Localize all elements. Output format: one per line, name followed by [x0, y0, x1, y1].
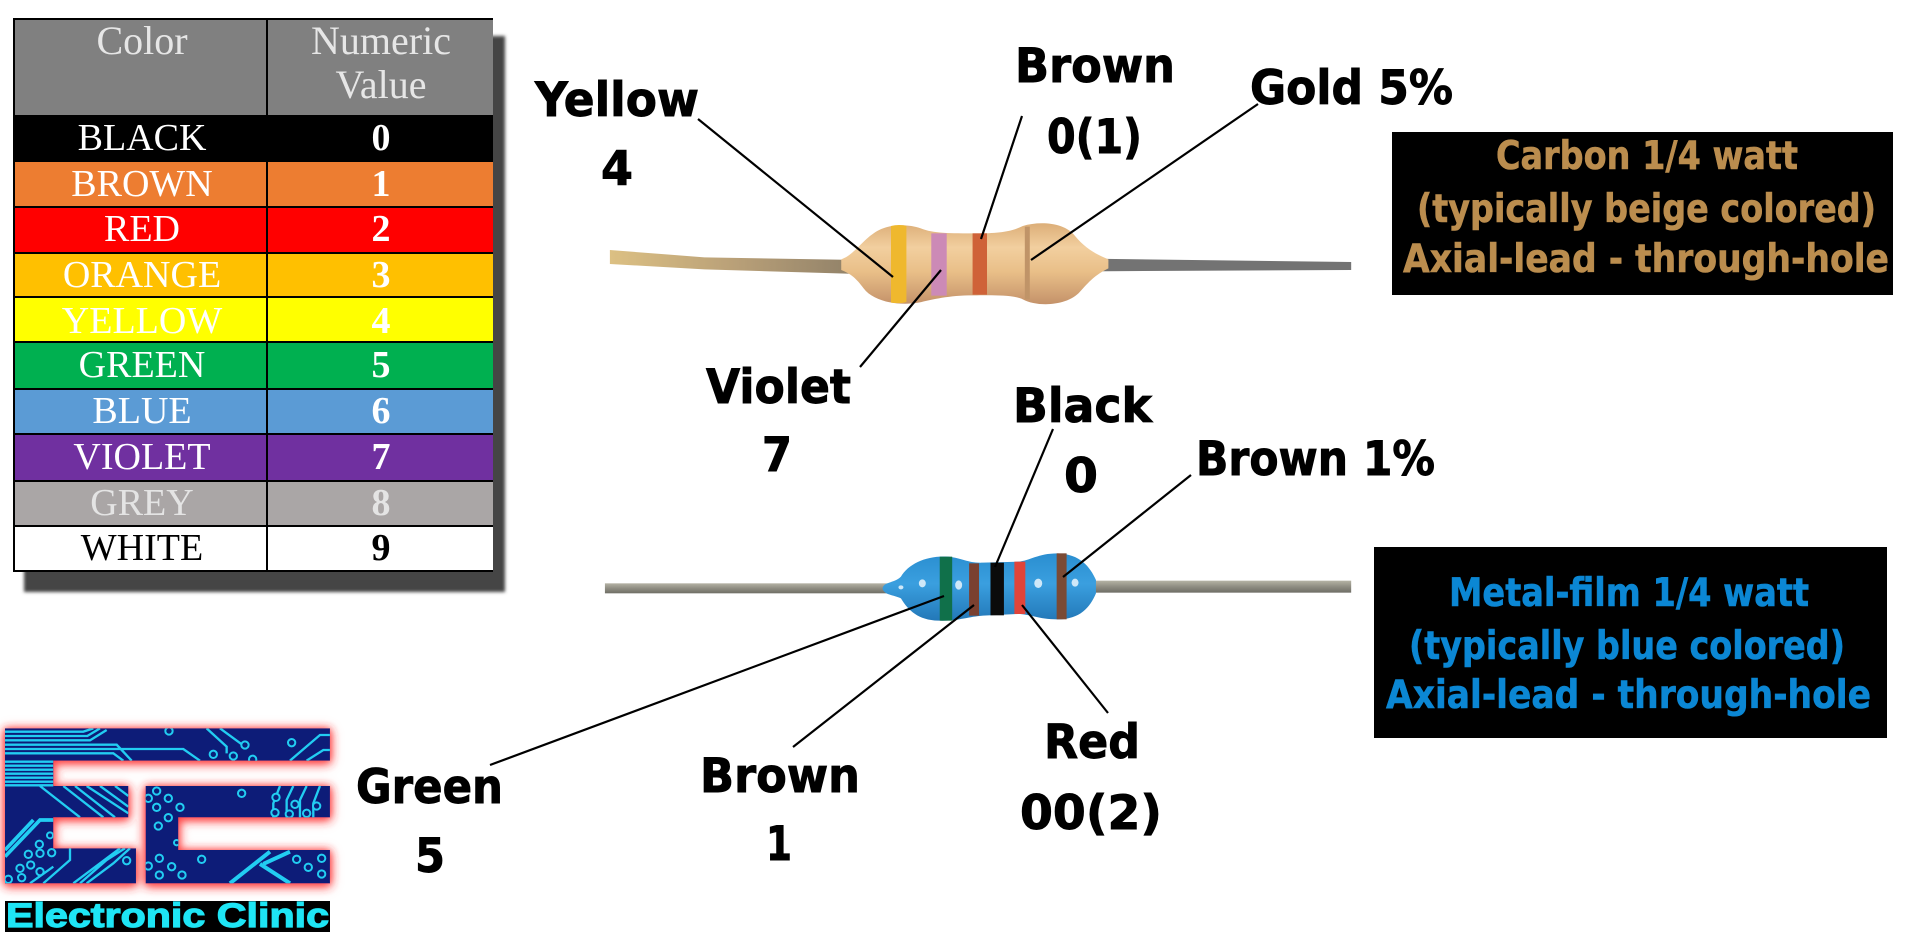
- table header: Numeric: [311, 18, 451, 63]
- table rows: 3: [372, 254, 390, 296]
- table rows: BLUE: [92, 390, 192, 432]
- table header: Color: [96, 18, 188, 63]
- label: Black 0: 0: [1064, 449, 1098, 504]
- table rows: BROWN: [71, 163, 213, 205]
- label: Yellow 4: [534, 73, 699, 197]
- table rows: 0: [372, 117, 390, 159]
- carbon resistor leader lines: [698, 104, 1258, 367]
- logo banner text: Electronic Clinic: [6, 897, 329, 935]
- table rows: ORANGE: [63, 254, 221, 296]
- label: Green 5: Green: [356, 760, 503, 815]
- label: Yellow 4: 4: [601, 142, 633, 197]
- label: Red 00(2): 00(2): [1020, 786, 1162, 841]
- table header: Value: [335, 62, 427, 107]
- table rows: BLACK: [78, 117, 207, 159]
- label: Brown 1: 1: [766, 817, 792, 872]
- table rows: [62, 117, 390, 569]
- carbon resistor: [610, 223, 1351, 304]
- icon: EC circuit board letters: [5, 727, 330, 883]
- table header: [96, 18, 451, 107]
- table rows: 6: [372, 390, 390, 432]
- table rows: 8: [372, 482, 390, 524]
- table rows: 5: [372, 344, 390, 386]
- label: Red 00(2): [1020, 715, 1162, 841]
- panel: carbon description: Carbon 1/4 watt: [1496, 134, 1798, 179]
- logo: Electronic Clinic: [5, 727, 330, 935]
- label: Brown 1: [700, 749, 860, 872]
- label: Green 5: [356, 760, 503, 884]
- table rows: YELLOW: [62, 300, 222, 342]
- table rows: 1: [372, 163, 390, 205]
- panel: color code table: [13, 18, 505, 592]
- label: Green 5: 5: [415, 829, 445, 884]
- label: Violet 7: Violet: [706, 360, 851, 415]
- label: Black 0: Black: [1013, 379, 1154, 434]
- table rows: 4: [372, 300, 390, 342]
- table rows: RED: [104, 208, 180, 250]
- label: Brown 1%: Brown 1%: [1196, 432, 1435, 487]
- table rows: GREY: [90, 482, 194, 524]
- label: Brown 1: Brown: [700, 749, 860, 804]
- metal-film resistor leader lines: [490, 429, 1191, 765]
- label: Brown 0(1): 0(1): [1047, 110, 1142, 165]
- table rows: GREEN: [79, 344, 205, 386]
- metal-film resistor: [605, 553, 1351, 621]
- label: Violet 7: 7: [762, 428, 792, 483]
- label: Gold 5%: Gold 5%: [1250, 61, 1453, 116]
- panel: metal-film description: Axial-lead - through-hole: [1386, 673, 1871, 718]
- panel: metal-film description: [1374, 547, 1887, 738]
- label: Red 00(2): Red: [1044, 715, 1140, 770]
- panel: metal-film description: Metal-film 1/4 watt: [1449, 571, 1809, 616]
- panel: carbon description: [1392, 132, 1893, 295]
- label: Brown 0(1): Brown: [1015, 39, 1175, 94]
- label: Brown 0(1): [1015, 39, 1175, 165]
- table drop shadow: [24, 36, 505, 592]
- panel: metal-film description: (typically blue colored): [1409, 624, 1845, 669]
- label: Black 0: [1013, 379, 1154, 504]
- table rows: 2: [372, 208, 390, 250]
- label: Yellow 4: Yellow: [534, 73, 699, 128]
- table rows: 9: [372, 527, 390, 569]
- table rows: VIOLET: [73, 436, 211, 478]
- label: Violet 7: [706, 360, 851, 483]
- table rows: 7: [372, 436, 390, 478]
- table rows: WHITE: [81, 527, 203, 569]
